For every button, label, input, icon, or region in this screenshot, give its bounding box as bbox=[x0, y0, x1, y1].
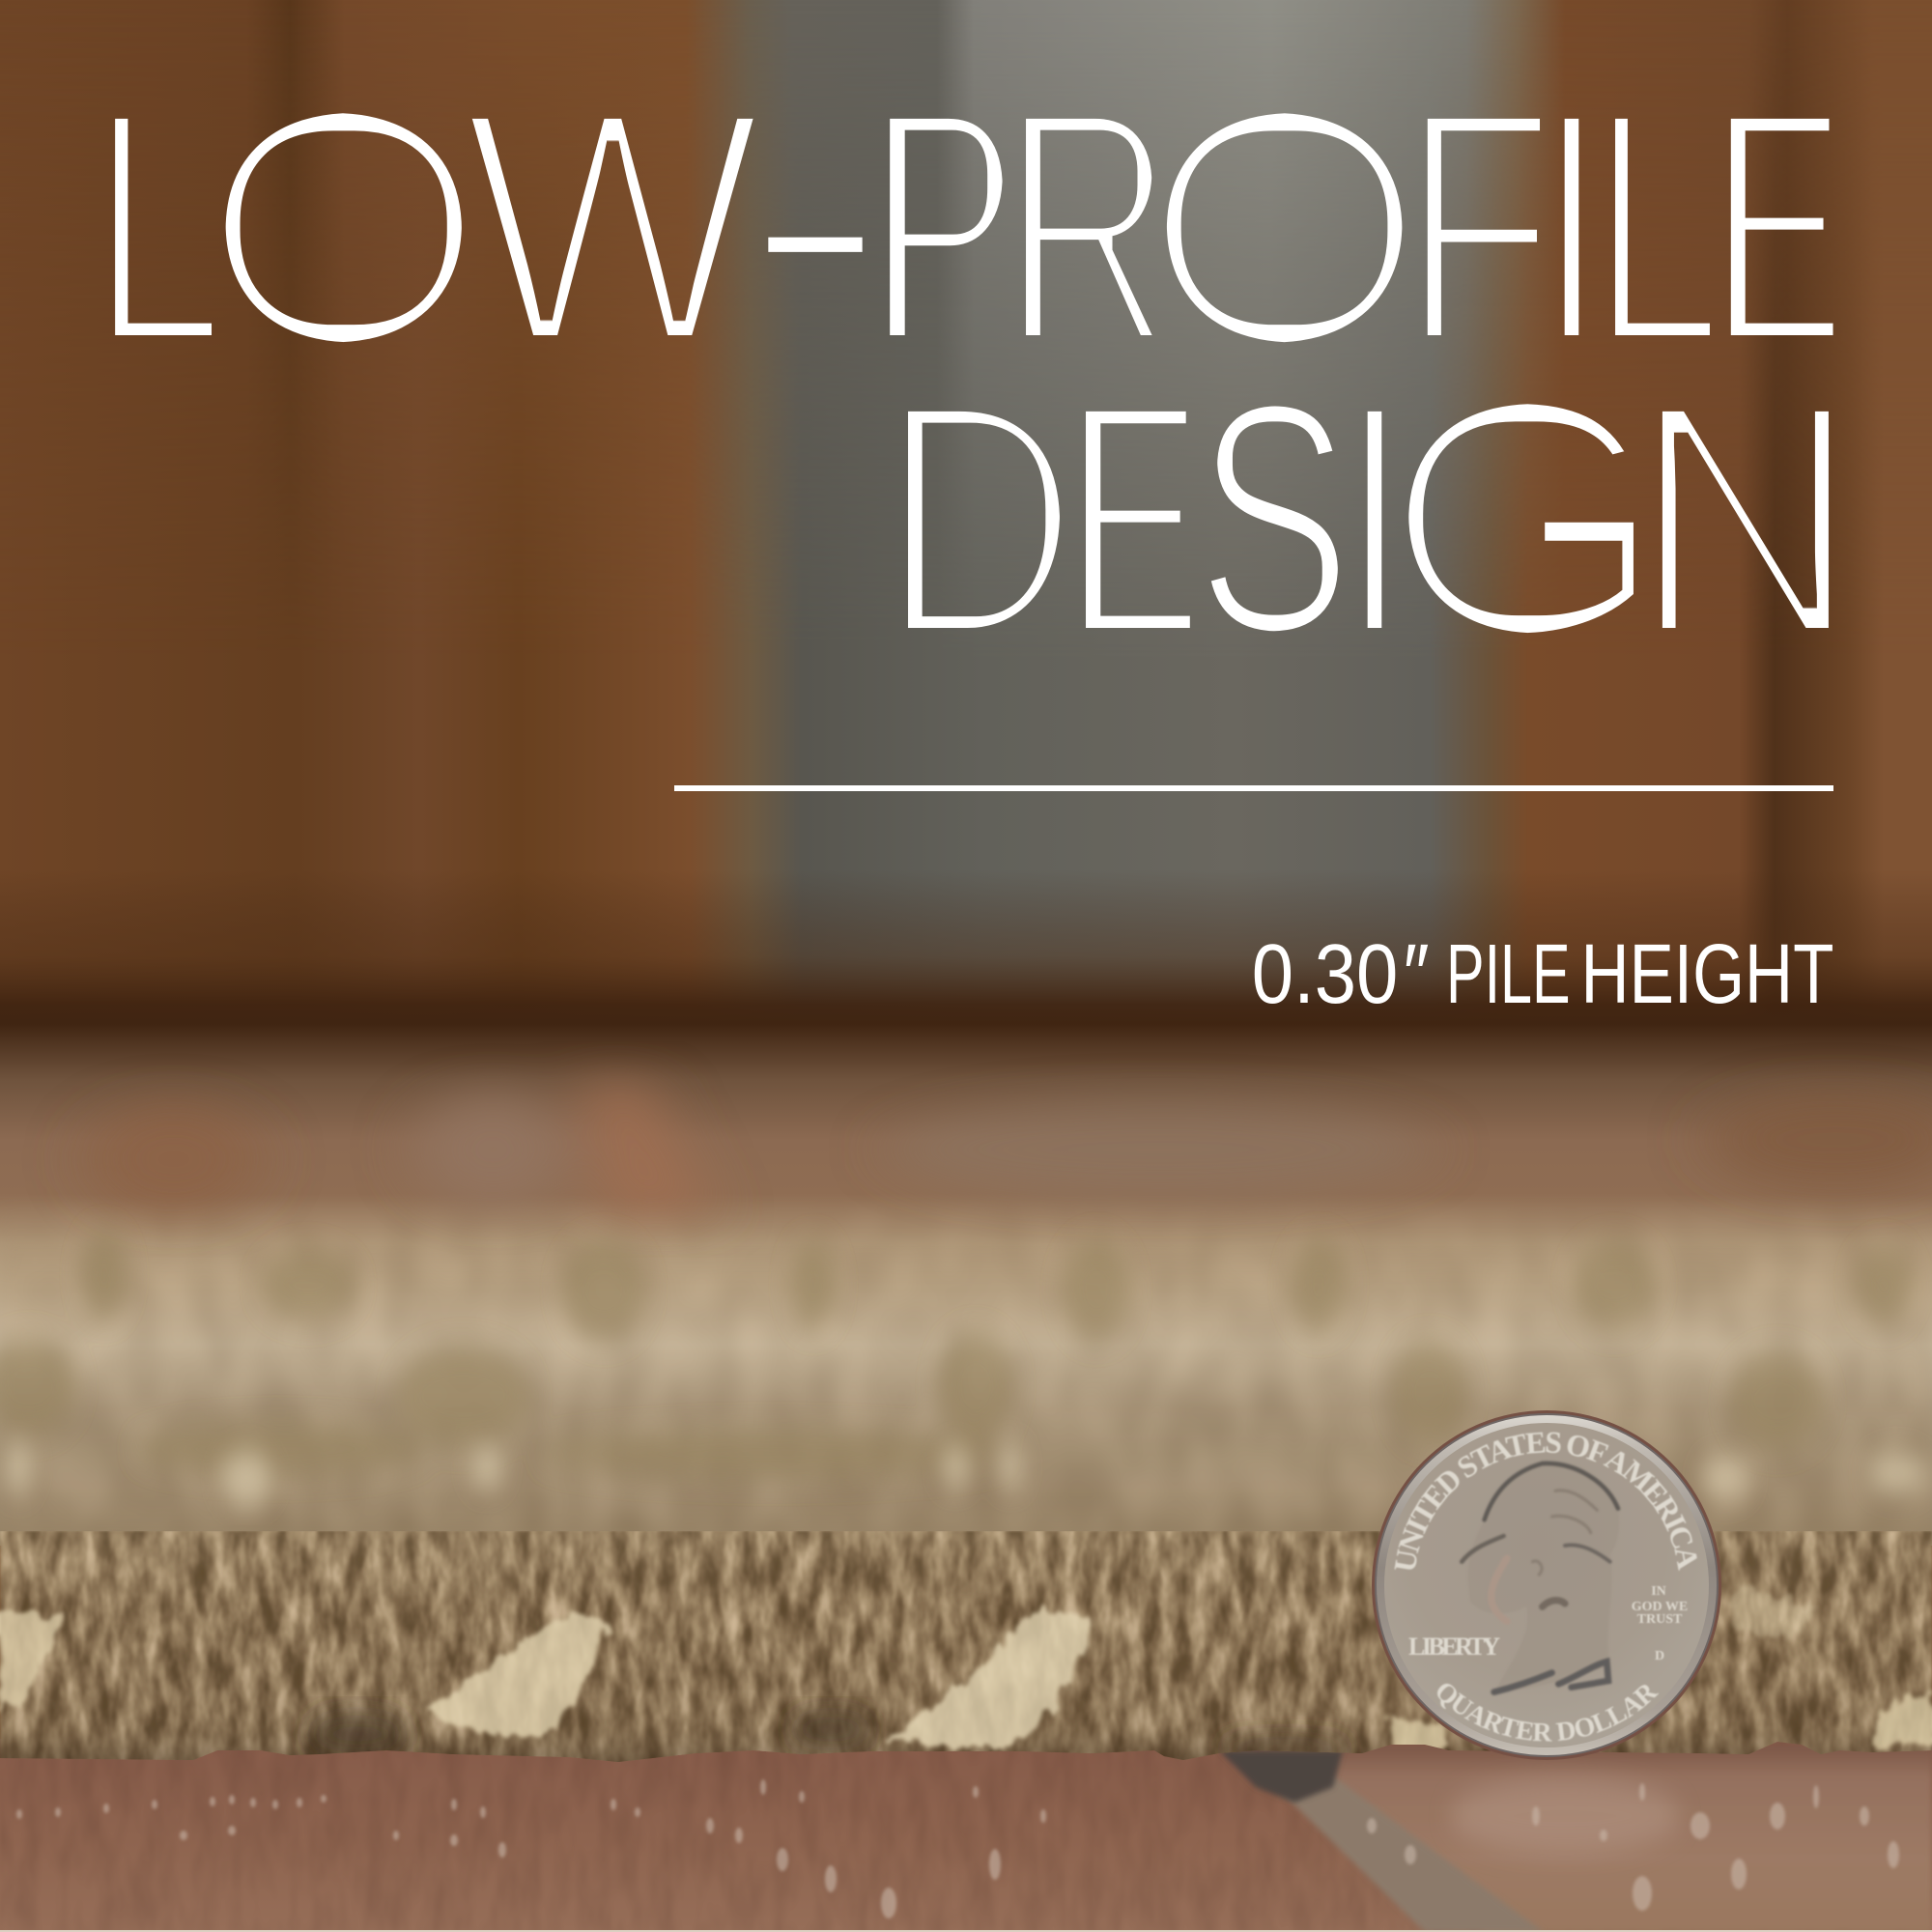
title line 2: DESIGN: S bbox=[1196, 335, 1351, 702]
coin: US quarter standing against rug bbox=[1372, 1410, 1721, 1760]
subheading: 0.30" pile height: HEIGHT bbox=[1580, 926, 1833, 1021]
coin text: IN GOD WE TRUST: TRUST bbox=[1637, 1612, 1683, 1627]
coin text: IN GOD WE TRUST: GOD WE bbox=[1632, 1600, 1688, 1614]
coin mint mark: D bbox=[1655, 1649, 1664, 1663]
foreground wood floor bbox=[0, 1739, 1932, 1932]
title line 2: DESIGN bbox=[880, 331, 1861, 706]
coin rim bbox=[1376, 1414, 1718, 1756]
title line 2: DESIGN: E bbox=[1067, 333, 1201, 706]
background: blurred floor and out-of-focus rug surface bbox=[0, 869, 1932, 1546]
rug edge in focus with wavy bottom bbox=[0, 1531, 1932, 1763]
title line 2: DESIGN: I bbox=[1330, 333, 1419, 706]
rug braid: cream strand centre-right bbox=[884, 1611, 1090, 1747]
divider rule under the title bbox=[674, 785, 1833, 791]
subheading: 0.30" pile height: ″ bbox=[1400, 927, 1429, 1021]
title line 1: LOW-PROFILE bbox=[91, 30, 1843, 414]
title line 1: LOW-PROFILE: L bbox=[91, 40, 224, 412]
floor highlight near coin bbox=[1449, 1777, 1681, 1855]
subheading: 0.30" pile height: 0.30 bbox=[1252, 927, 1398, 1021]
subheading: 0.30" pile height: PILE bbox=[1446, 927, 1571, 1021]
title line 2: DESIGN: N bbox=[1630, 332, 1861, 705]
rug braid: cream strand left bbox=[0, 1611, 60, 1710]
coin inscriptions bbox=[1394, 1432, 1698, 1743]
rug fibres over the braids bbox=[0, 1588, 1932, 1762]
title: LOW-PROFILE DESIGN bbox=[91, 30, 1861, 706]
title line 1: LOW-PROFILE: P bbox=[868, 41, 1017, 413]
title line 1: LOW-PROFILE: W bbox=[461, 40, 767, 413]
coin portrait bbox=[1462, 1463, 1619, 1692]
subheading: 0.30" pile height bbox=[1252, 926, 1833, 1021]
rug braid: cream strand centre-left bbox=[427, 1614, 611, 1737]
title line 1: LOW-PROFILE: F bbox=[1403, 40, 1554, 413]
coin text: LIBERTY: LIBERTY bbox=[1408, 1633, 1500, 1661]
bottom edge line bbox=[0, 1930, 1932, 1932]
floor plank right bbox=[1256, 1744, 1932, 1932]
floor plank left bbox=[0, 1739, 1932, 1932]
title line 1: LOW-PROFILE: L bbox=[1591, 40, 1722, 413]
title line 1: LOW-PROFILE: - bbox=[741, 30, 890, 407]
title line 2: DESIGN: G bbox=[1379, 331, 1672, 705]
title line 1: LOW-PROFILE: O bbox=[197, 41, 491, 414]
coin text: QUARTER DOLLAR: QUARTER DOLLAR bbox=[1437, 1683, 1660, 1743]
rug shadow patches bbox=[304, 1711, 1352, 1758]
coin copper edge bbox=[1372, 1410, 1721, 1760]
title line 1: LOW-PROFILE: R bbox=[1003, 41, 1173, 413]
title line 1: LOW-PROFILE: I bbox=[1527, 41, 1616, 413]
background: blurred wooden wall and grey doorway bbox=[0, 0, 1932, 1063]
floor plank seam band bbox=[1241, 1753, 1544, 1932]
coin text: UNITED STATES OF AMERICA: UNITED STATES OF AMERICA bbox=[1394, 1432, 1698, 1571]
coin text: IN GOD WE TRUST: IN bbox=[1651, 1584, 1666, 1599]
rug braid: cream strands right of coin bbox=[1391, 1584, 1932, 1750]
title line 1: LOW-PROFILE: E bbox=[1713, 40, 1843, 413]
title line 1: LOW-PROFILE: O bbox=[1138, 41, 1431, 414]
floor seam dark gap bbox=[1219, 1750, 1343, 1803]
floor speckles bbox=[16, 1779, 1899, 1918]
coin face bbox=[1384, 1423, 1709, 1747]
title line 2: DESIGN: D bbox=[880, 333, 1079, 706]
